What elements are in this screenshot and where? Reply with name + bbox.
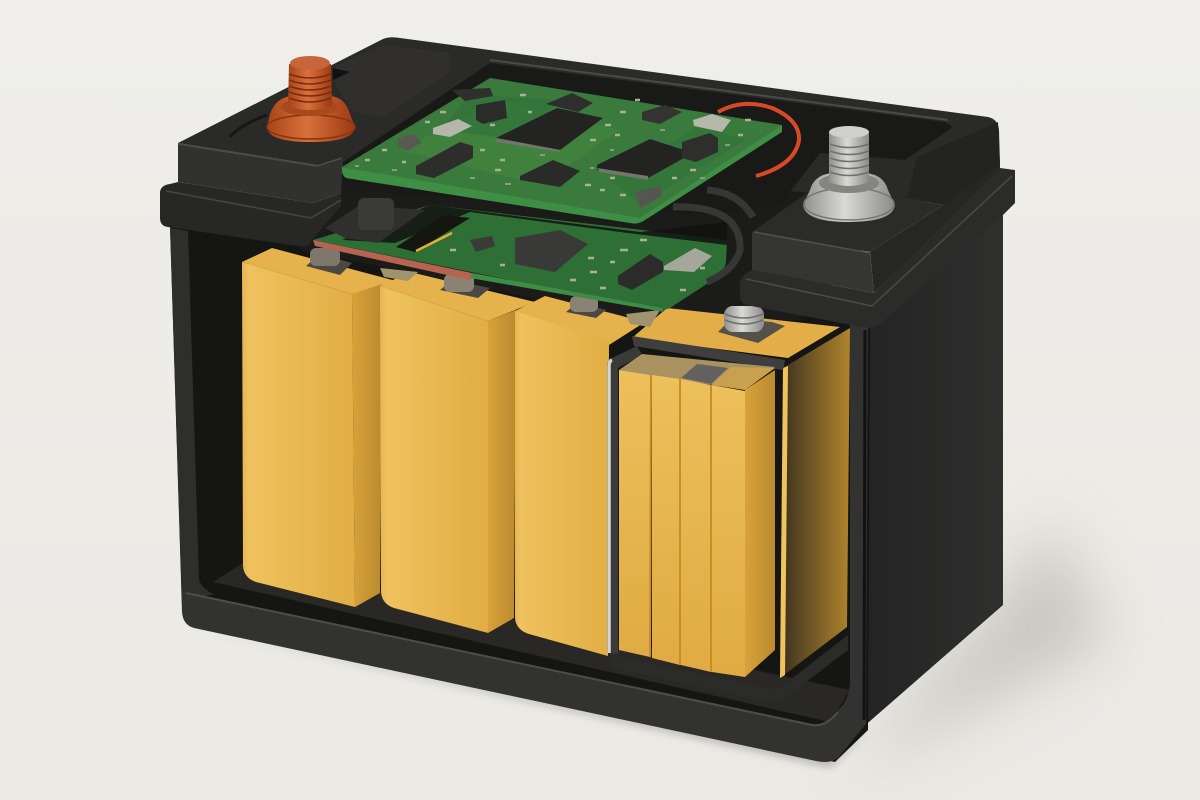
right tall chip [682, 133, 718, 162]
solder specks [365, 95, 751, 195]
metal part [664, 248, 712, 272]
right block front [752, 232, 874, 293]
copper edge [313, 240, 472, 280]
red wire [718, 104, 799, 176]
recessed panel [333, 45, 450, 117]
cell 2 [380, 272, 535, 633]
casing inner panel [780, 328, 850, 678]
left connector [325, 205, 425, 243]
small grey chip [398, 134, 422, 151]
tall chip [476, 100, 507, 124]
panel groove [333, 68, 350, 80]
right block side [870, 165, 1000, 293]
right rear chip [642, 105, 682, 124]
dark strip [632, 336, 785, 370]
gold strip slot [396, 215, 470, 252]
left connector chip [416, 142, 473, 178]
top chip [546, 93, 593, 112]
right chip [597, 139, 684, 178]
casing top [632, 308, 840, 358]
centre connector [515, 230, 588, 272]
slab c [681, 379, 711, 672]
board thickness [342, 125, 782, 224]
slab a [619, 370, 651, 657]
lower circuit board [313, 198, 727, 312]
lid [160, 37, 1015, 328]
terminal base [267, 96, 355, 142]
lid top surface [178, 37, 1000, 205]
positive copper terminal [267, 56, 355, 142]
overhead shadow [342, 205, 727, 245]
floor [213, 563, 850, 722]
left frame [170, 228, 214, 604]
metal part: left [433, 119, 472, 137]
green edge [470, 273, 664, 312]
top circuit board [342, 78, 782, 224]
right block top [752, 193, 943, 252]
threaded post [829, 132, 869, 186]
rear connector [452, 88, 493, 101]
inner cavity [170, 225, 870, 762]
slab b [652, 375, 680, 665]
left block front [178, 143, 343, 203]
rear rim highlight [490, 60, 948, 120]
interior backdrop [300, 62, 953, 320]
cell 1 [242, 248, 400, 607]
slab side [745, 370, 775, 677]
middle chip [520, 160, 580, 187]
slab cells [619, 354, 775, 677]
left rim [160, 182, 341, 246]
metal frame [607, 346, 642, 654]
slab d [712, 385, 745, 677]
cell terminals [306, 248, 660, 327]
main chip [496, 108, 603, 150]
left deck recess line [230, 115, 267, 137]
terminal on open cell [718, 306, 785, 343]
black cables [673, 190, 753, 282]
terminal base [803, 173, 895, 222]
right side wall [860, 215, 1003, 728]
black chip [618, 254, 663, 290]
case body [170, 62, 1003, 762]
cast shadow [190, 520, 1110, 770]
casing edge [780, 366, 788, 678]
bottom frame [182, 322, 868, 762]
threaded post [288, 64, 332, 110]
bottom tray [612, 635, 848, 704]
cell 3 [515, 296, 645, 656]
lower small chip [635, 186, 662, 208]
board [313, 205, 727, 310]
slab tops [619, 354, 775, 390]
open cell back casing [632, 308, 850, 678]
right rim [740, 168, 1015, 328]
board surface [342, 78, 782, 218]
metal part: right [693, 114, 731, 132]
right raised corner block [907, 122, 1000, 205]
negative steel terminal [803, 126, 895, 222]
solder specks [450, 240, 705, 290]
small chip [470, 236, 495, 252]
lid opening [340, 63, 953, 215]
shaded patches [440, 95, 560, 140]
